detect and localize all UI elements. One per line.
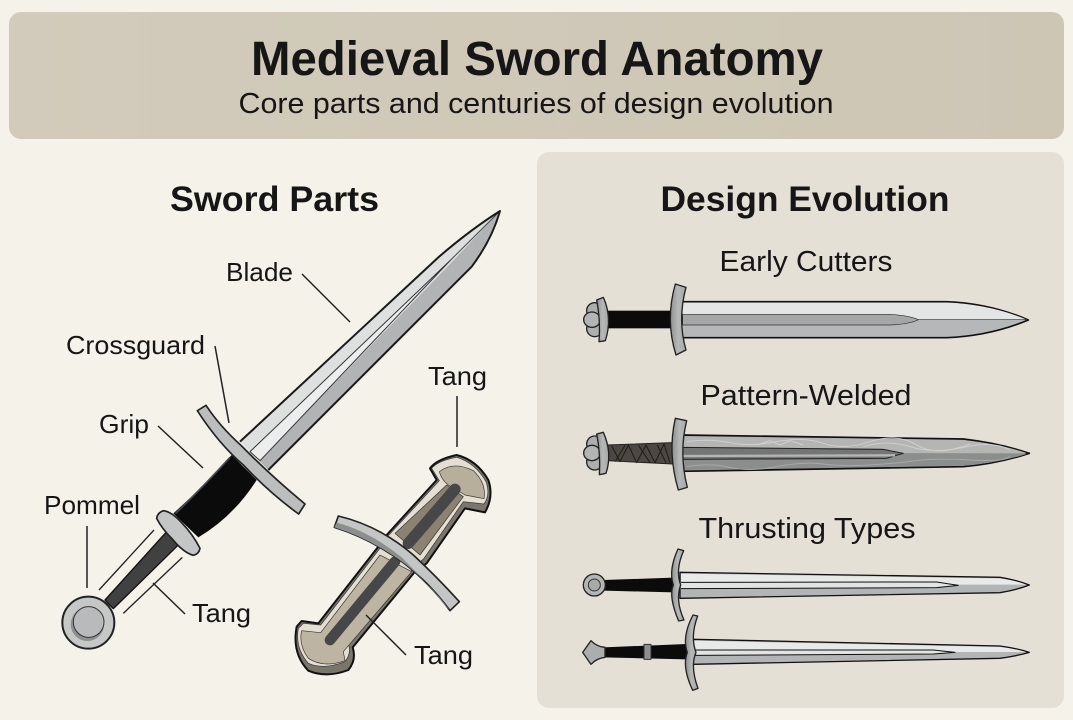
crossguard <box>197 405 305 514</box>
illustration: sectioned hilt <box>296 455 491 674</box>
label: grip: Grip <box>99 409 149 439</box>
tang <box>105 532 180 609</box>
label: pommel <box>44 490 140 588</box>
hilt body <box>296 455 491 674</box>
panel: design evolution <box>537 152 1064 708</box>
label: tang (lower hilt): Tang <box>414 640 473 670</box>
upper channel <box>395 485 463 555</box>
label: tang (lower hilt) <box>366 615 473 670</box>
header banner <box>9 12 1064 139</box>
subtitle: Core parts and centuries of design evolution <box>238 88 834 120</box>
lower inset <box>301 555 412 664</box>
sword: pattern-welded <box>584 418 1029 490</box>
label: blade <box>226 257 350 322</box>
collar <box>157 511 200 555</box>
heading: sword parts: Sword Parts <box>170 180 379 219</box>
label: tang (upper hilt): Tang <box>428 361 487 391</box>
rim <box>298 457 488 666</box>
label: tang (upper hilt) <box>428 361 487 447</box>
heading: design evolution: Design Evolution <box>660 180 950 219</box>
label: tang (main sword): Tang <box>192 598 251 628</box>
illustration: main sword <box>62 211 500 649</box>
sword: early cutters <box>584 284 1028 355</box>
lower tang bar <box>330 562 395 640</box>
upper tang bar <box>408 489 455 543</box>
label: blade: Blade <box>226 257 293 287</box>
label: pommel: Pommel <box>44 490 140 520</box>
upper inset <box>439 466 484 499</box>
sword: thrusting type two <box>583 615 1029 690</box>
tang outline lines <box>99 530 182 613</box>
label: tang (main sword) <box>153 583 251 628</box>
label: early cutters: Early Cutters <box>720 246 892 278</box>
pommel <box>62 597 114 649</box>
label: crossguard <box>66 330 229 423</box>
blade <box>240 211 500 470</box>
label: pattern-welded: Pattern-Welded <box>700 380 912 412</box>
sword: thrusting type one <box>583 549 1029 621</box>
grip <box>173 455 257 537</box>
label: crossguard: Crossguard <box>66 330 205 360</box>
title: Medieval Sword Anatomy <box>251 33 823 86</box>
guard <box>334 516 459 611</box>
label: grip <box>99 409 203 468</box>
label: thrusting types: Thrusting Types <box>698 513 916 545</box>
